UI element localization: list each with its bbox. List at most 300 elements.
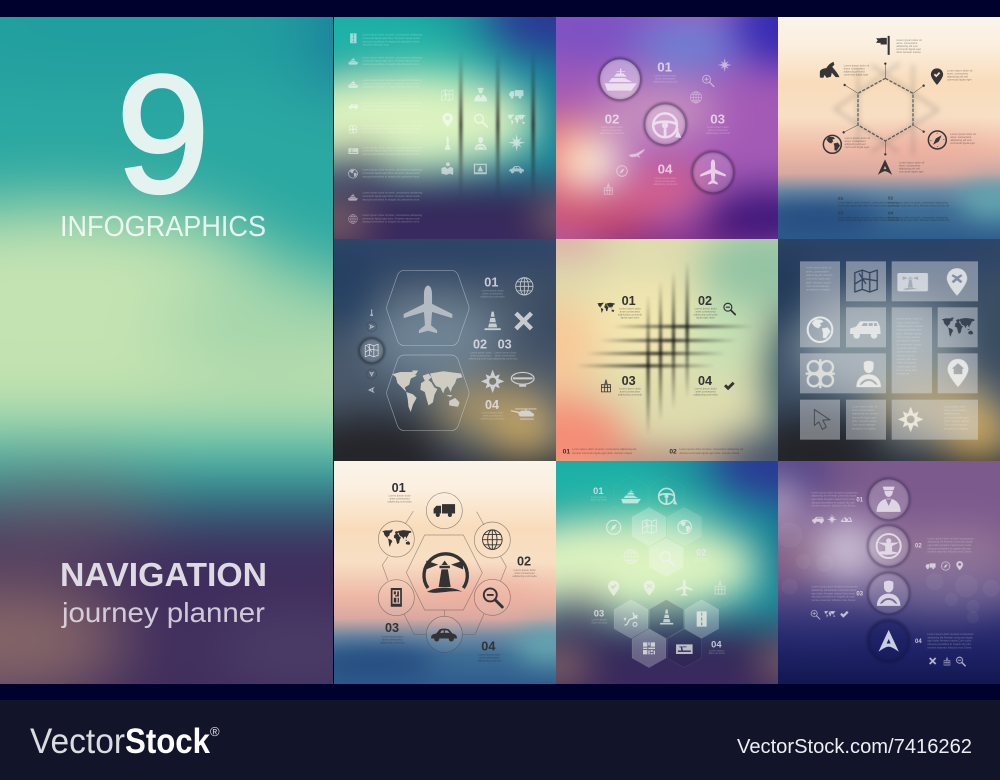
label text: Lorem ipsum dolor <box>707 125 729 129</box>
icon: magnifier plus <box>811 610 820 619</box>
number text: dolor sit amet <box>591 498 607 502</box>
icon: magnifier <box>660 552 674 566</box>
peach background <box>755 15 1000 242</box>
icon: tower <box>445 136 451 150</box>
label text: Lorem ipsum dolor <box>601 125 623 129</box>
number text: adipiscing commodo <box>618 313 643 317</box>
callout text: commodo ligula eget <box>896 47 921 51</box>
icon: interchange <box>349 125 357 134</box>
dark icons <box>597 303 735 392</box>
bottom legend <box>838 196 950 222</box>
hexagon frame: plane <box>387 270 469 346</box>
icon: map book <box>441 162 453 175</box>
bottom legend: Lorem ipsum dolor sit amet, consectetur adipiscing <box>838 215 898 219</box>
bottom legend: 04 <box>888 210 894 215</box>
icon: route <box>623 613 638 626</box>
numbers: 04 <box>485 398 499 412</box>
callout text: adipiscing elit sed <box>845 142 866 146</box>
icon: world map <box>392 371 463 412</box>
crossing shadow lines <box>576 261 753 435</box>
bottom legend: 01 <box>838 196 844 201</box>
paragraph text <box>811 490 974 649</box>
icon: map <box>442 90 453 101</box>
paragraph text: natoque penatibus et magnis dis part <box>927 546 971 550</box>
number text: adipiscing commodo <box>380 640 405 644</box>
bottom notes: Aenean commodo ligula eget dolor. Aenean massa <box>572 451 632 455</box>
icon: pin cross <box>947 268 967 296</box>
callout text: commodo ligula eget <box>899 170 924 174</box>
icon list text: Lorem ipsum dolor sit amet, consectetur adipiscing <box>362 55 423 59</box>
icon list text: commodo ligula eget dolor. Aenean massa sociis <box>362 81 420 85</box>
tile text: Cum sociis natoque <box>897 335 921 339</box>
icon: compass <box>928 131 946 149</box>
numbers: 02 <box>698 294 712 308</box>
number text: amet consectetur <box>382 637 403 641</box>
callout text: amet, consectetur <box>950 135 972 139</box>
circle: plane <box>692 152 734 193</box>
icon list text: Lorem ipsum dolor sit amet, consectetur adipiscing <box>362 145 423 149</box>
icon: earth <box>678 520 691 534</box>
number text: Lorem ipsum dolor <box>381 634 403 638</box>
icon: cone <box>660 609 673 624</box>
center lighthouse emblem <box>424 554 467 593</box>
tile text: penatibus et magnis <box>897 339 921 343</box>
callout text: amet, consectetur <box>845 139 866 143</box>
small icons <box>604 58 732 194</box>
paragraph text: eget dolor Aenean massa Cum sociis <box>811 497 856 501</box>
brand: VectorStock: Stock <box>125 722 210 761</box>
callout text: amet, consectetur <box>947 72 968 76</box>
number text: Lorem ipsum dolor <box>478 653 500 657</box>
icon: pin <box>442 113 453 127</box>
icon: blimp <box>511 372 534 387</box>
paragraph text: adipiscing elit Aenean commodo ligula <box>811 494 857 498</box>
dark hexagons <box>649 600 701 668</box>
icon: world <box>824 611 835 618</box>
numbers <box>473 276 512 412</box>
icon: pin check <box>608 581 619 596</box>
bottom legend: commodo ligula eget dolor Aenean massa sociis nat <box>888 218 950 222</box>
callout text: amet, consectetur <box>844 66 865 70</box>
paragraph text: adipiscing elit Aenean commodo ligula <box>927 635 973 639</box>
circle: driver <box>868 573 909 614</box>
icon: cross <box>514 312 533 330</box>
honeycomb icons <box>607 488 725 654</box>
number text: ligula eget dolor <box>696 316 715 320</box>
label text: amet consectetur <box>602 128 622 132</box>
callout text: adipiscing elit sed <box>844 69 865 73</box>
image id: VectorStock.com/7416262 <box>737 736 972 758</box>
number text: adipiscing commodo <box>481 294 505 298</box>
icon list text: Lorem ipsum dolor sit amet, consectetur adipiscing <box>362 33 423 37</box>
bottom legend: commodo ligula eget dolor Aenean massa sociis nat <box>838 203 900 207</box>
bottom legend: Lorem ipsum dolor sit amet, consectetur adipiscing <box>838 201 898 205</box>
icon: world <box>382 530 411 547</box>
numbered labels: 01 <box>657 60 673 75</box>
icon: road <box>350 33 357 43</box>
circle: sailor <box>868 479 909 520</box>
tile text: Nulla consequat <box>897 361 916 365</box>
pastel background <box>489 171 856 538</box>
number text: adipiscing commodo <box>513 574 537 578</box>
paragraph text: natoque penatibus et magnis dis part <box>811 500 855 504</box>
icon list text: natoque penatibus et magnis dis parturient mont <box>362 62 419 66</box>
tile text: nascetur ridiculus <box>897 346 918 350</box>
icon: check <box>840 611 849 618</box>
icon: desk globe <box>516 278 533 295</box>
icon list text: commodo ligula eget dolor. Aenean massa sociis <box>362 149 420 153</box>
label text: adipiscing commodo <box>653 182 678 186</box>
bottom legend: 02 <box>888 196 894 201</box>
tile text: commodo ligula eget <box>852 415 877 419</box>
number labels: 01 <box>856 497 864 503</box>
icon: nav small <box>370 309 373 316</box>
icon list text: natoque penatibus et magnis dis parturient mont <box>362 130 419 134</box>
icon list text: commodo ligula eget dolor. Aenean massa sociis <box>362 104 420 108</box>
icon: car <box>431 629 457 642</box>
icon: yacht <box>621 490 641 503</box>
number text: adipiscing commodo <box>694 393 718 397</box>
callout text: Lorem ipsum dolor sit <box>947 69 973 73</box>
icon: house map <box>604 184 612 194</box>
number text: amet consectetur <box>495 353 516 357</box>
icon list text: commodo ligula eget dolor. Aenean massa sociis <box>362 59 420 63</box>
icon: map person <box>601 380 611 392</box>
tile text: adipiscing elit. Aenean <box>806 273 833 277</box>
number text: Lorem ipsum <box>694 556 710 560</box>
teal background <box>476 393 869 760</box>
icon: road <box>697 611 707 627</box>
icon: compass star <box>508 134 525 151</box>
icon: compass <box>941 562 950 570</box>
brand: VectorStock <box>30 722 220 761</box>
icon: suv <box>812 517 824 523</box>
icon: globe <box>690 92 702 103</box>
vertical shadow columns <box>459 52 535 198</box>
callout text: commodo ligula eget <box>844 72 868 76</box>
tile text: amet, consectetuer <box>806 269 829 273</box>
callout text: commodo ligula eget <box>845 145 869 149</box>
icon: qr map <box>643 642 655 654</box>
icon: screen <box>474 164 487 174</box>
numbers: 03 <box>498 338 512 352</box>
numbers: 01 <box>622 294 636 308</box>
icon: pin cross <box>644 580 655 596</box>
label text: amet consectetur <box>708 128 728 132</box>
panel: crossing shadows <box>489 171 856 538</box>
numbered labels <box>605 60 725 177</box>
tile text: penatibus et magnis <box>944 426 968 430</box>
icon list text: natoque penatibus et magnis dis parturient mont <box>362 220 419 224</box>
tile text: adipiscing elit. Aenean <box>897 324 924 328</box>
tile text: ultricies nec eu <box>897 353 915 357</box>
icon list text: natoque penatibus et magnis dis parturient mont <box>362 197 419 201</box>
panel: list with vertical shadows <box>334 17 556 239</box>
panel: lighthouse hexagon <box>311 460 587 687</box>
bokeh lights <box>777 522 1000 623</box>
number labels: 03 <box>856 592 864 598</box>
icon: truck <box>926 563 936 569</box>
tile text: penatibus et magnis <box>852 426 876 430</box>
numbers <box>593 486 722 649</box>
callout text: Lorem ipsum dolor sit <box>899 161 925 165</box>
icon: sign <box>676 644 693 654</box>
icon list text: natoque penatibus et magnis dis parturient mont <box>362 152 419 156</box>
small icon rows <box>811 514 965 666</box>
title: NAVIGATION: NAVIGATION <box>60 556 267 593</box>
icon: earth <box>823 135 841 153</box>
panel: hexagon honeycomb <box>476 393 869 760</box>
violet background <box>711 393 1000 777</box>
icon list text: nascetur ridiculus mus <box>362 43 389 47</box>
icon: rose <box>481 370 504 393</box>
icon list text: commodo ligula eget dolor. Aenean massa sociis <box>362 127 420 131</box>
label text: amet consectetur <box>655 179 676 183</box>
number text: Lorem ipsum dolor <box>470 350 492 354</box>
number text: amet consectetur <box>695 310 716 314</box>
icon list text <box>362 33 423 224</box>
tile text: amet, consectetuer <box>944 408 967 412</box>
tile text: fringilla vel <box>897 372 910 376</box>
callout text: dolor Aenean massa <box>896 50 921 54</box>
icon: driver <box>475 137 487 150</box>
tile text: commodo ligula eget <box>944 415 969 419</box>
numbered labels: 03 <box>710 111 725 126</box>
number text: adipiscing commodo <box>481 417 505 421</box>
label text: Lorem ipsum dolor <box>654 176 676 180</box>
icon: map pin <box>642 520 656 533</box>
numbers: 02 <box>517 555 531 569</box>
number text: dolor sit amet <box>709 651 725 655</box>
icon: world <box>597 303 615 313</box>
icon: circle nav down <box>367 369 377 379</box>
bottom legend: Lorem ipsum dolor sit amet, consectetur adipiscing <box>888 201 948 205</box>
icon list column <box>348 33 359 223</box>
icon: bird <box>629 149 645 158</box>
bottom legend: commodo ligula eget dolor Aenean massa sociis nat <box>888 203 950 207</box>
icon: cursor <box>814 410 830 429</box>
icon: earth <box>808 317 832 342</box>
paragraph text: eget dolor Aenean massa Cum sociis <box>811 591 856 595</box>
panel: tile mosaic <box>711 171 1000 538</box>
number text: amet consectetur <box>479 656 500 660</box>
icon list text: natoque penatibus et magnis dis parturient mont <box>362 174 419 178</box>
number text: amet consectetur <box>482 291 503 295</box>
icon list text: commodo ligula eget dolor. Aenean massa sociis <box>362 216 420 220</box>
number text: amet consectetur <box>514 571 535 575</box>
number text: adipiscing commodo <box>469 356 493 360</box>
numbers: 01 <box>593 486 604 496</box>
tile text: Cum sociis natoque <box>806 284 830 288</box>
hexagon frame: world <box>387 355 469 431</box>
numbers: 02 <box>473 338 487 352</box>
number text: Lorem ipsum dolor <box>619 307 641 311</box>
icon: world <box>507 114 526 125</box>
tile icons <box>806 268 975 432</box>
callout text: adipiscing elit sed <box>899 167 920 171</box>
big numeral 9: 9 <box>116 40 210 228</box>
connector pins <box>843 63 925 155</box>
dark slate background <box>711 171 1000 538</box>
icon: suv <box>850 321 881 339</box>
icon: phone map <box>391 588 402 607</box>
tile text: dolor. Aenean massa <box>944 419 969 423</box>
number text: Lorem ipsum dolor <box>619 387 641 391</box>
tile text: pretium quis sem <box>897 357 918 361</box>
panel: circles on purple <box>556 17 778 239</box>
numbers: 02 <box>696 548 707 558</box>
purple background <box>556 17 778 239</box>
icon: truck <box>509 90 523 99</box>
icon: flag <box>876 36 890 55</box>
footer bar <box>0 700 1000 780</box>
number text: adipiscing commodo <box>694 313 718 317</box>
number text: adipiscing commodo <box>618 393 643 397</box>
callout text: Lorem ipsum dolor sit <box>845 136 870 140</box>
icon: cross <box>929 657 936 665</box>
tile text: dolor. Aenean massa <box>806 280 831 284</box>
tile text: penatibus et magnis <box>806 288 830 292</box>
number text: dolor sit amet <box>591 620 608 624</box>
callout text: Lorem ipsum dolor sit <box>844 63 869 67</box>
label text: adipiscing commodo <box>653 79 678 83</box>
numbers: 03 <box>385 621 399 635</box>
label: INFOGRAPHICS: INFOGRAPHICS <box>60 211 266 243</box>
number text <box>469 288 518 421</box>
tile text: Cum sociis natoque <box>944 423 968 427</box>
icon: world dark <box>942 318 975 337</box>
icon list text: Lorem ipsum dolor sit amet, consectetur adipiscing <box>362 213 423 217</box>
tile blocks <box>800 261 978 440</box>
icon: check <box>724 382 735 390</box>
active circle: map <box>359 338 384 363</box>
tile text: Lorem ipsum dolor sit <box>806 266 832 270</box>
label text <box>600 73 731 186</box>
number text: adipiscing commodo <box>493 356 518 360</box>
number text <box>591 495 725 655</box>
callout text: Lorem ipsum dolor sit <box>950 132 976 136</box>
tile text <box>806 266 969 430</box>
icon circles <box>378 493 510 652</box>
number text: adipiscing commodo <box>388 500 412 504</box>
paragraph text: eget dolor Aenean massa Cum sociis <box>927 639 972 643</box>
icon: lighthouse card <box>897 273 928 291</box>
brand: VectorStock: ® <box>210 724 220 739</box>
paragraph text: natoque penatibus et magnis dis part <box>927 642 971 646</box>
icon grid <box>441 88 526 175</box>
outlined hexagons <box>597 477 737 608</box>
panel: hexagon peach <box>755 15 1000 242</box>
number text: Lorem ipsum dolor <box>695 307 717 311</box>
dark slate background <box>267 171 634 538</box>
number text <box>618 307 718 397</box>
number labels <box>856 497 922 645</box>
icon: globe <box>483 530 502 549</box>
numbers: 04 <box>481 639 495 653</box>
icon: compass rose <box>898 406 924 432</box>
icon: ship <box>348 80 359 88</box>
icon: road clover <box>806 359 835 388</box>
tile text: adipiscing elit. Aenean <box>852 412 879 416</box>
icon: star <box>718 58 732 72</box>
icon: jeep <box>348 104 358 110</box>
number text: Lorem ipsum dolor <box>695 387 717 391</box>
tile text: Lorem ipsum dolor sit <box>897 317 922 321</box>
circle: ship <box>599 59 641 100</box>
icon list text: Lorem ipsum dolor sit amet, consectetur adipiscing <box>362 101 423 105</box>
right icons <box>481 278 536 419</box>
dark icons <box>382 504 502 642</box>
icon: nav left <box>368 387 375 393</box>
icon: plane <box>676 580 693 596</box>
icon: cone <box>485 312 501 330</box>
icon: globe <box>349 215 357 223</box>
number text: Lorem ipsum dolor <box>482 411 504 415</box>
central hexagon and connectors <box>382 511 506 634</box>
tile text: dis parturient montes <box>897 342 922 346</box>
numbers: 01 <box>484 276 498 290</box>
panel: hexagon plane and world <box>267 171 634 538</box>
number text: Lorem ipsum <box>592 618 608 622</box>
tile text: Cum sociis natoque <box>852 423 876 427</box>
paragraph text: eget dolor Aenean massa Cum sociis <box>927 543 972 547</box>
number text: adipiscing commodo <box>477 659 502 663</box>
icon: pin <box>956 561 963 570</box>
icon: boat <box>348 58 358 65</box>
number text <box>380 494 537 663</box>
numbers: 03 <box>622 374 636 388</box>
icon: star <box>827 514 837 525</box>
number text: Lorem ipsum dolor <box>389 494 411 498</box>
circle: lighthouse wheel <box>868 525 909 567</box>
icon list text: natoque penatibus et magnis dis parturient mont <box>362 39 419 43</box>
number text: Lorem ipsum dolor <box>514 568 536 572</box>
paragraph text: montes nascetur ridiculus mus Donec <box>927 645 972 649</box>
label text: Lorem ipsum dolor <box>654 73 676 77</box>
tile text: massa quis enim <box>897 364 917 368</box>
hexagon outline <box>858 78 913 141</box>
numbered labels: 02 <box>605 111 619 126</box>
paragraph text: montes nascetur ridiculus mus Donec <box>811 598 856 602</box>
icon list text: natoque penatibus et magnis dis parturient mont <box>362 107 419 111</box>
paragraph text: Lorem ipsum dolor sit amet consectetur <box>927 632 974 636</box>
panel: cover title <box>0 17 333 684</box>
peach background <box>311 460 587 687</box>
callout text: amet, consectetur <box>896 41 918 45</box>
number text: amet consectetur <box>620 390 640 394</box>
number text: Lorem ipsum dolor <box>494 350 516 354</box>
icon: navigation arrow <box>878 159 892 175</box>
paragraph text: adipiscing elit Aenean commodo ligula <box>927 540 973 544</box>
dark icons <box>820 36 946 175</box>
number text: Lorem ipsum <box>591 495 607 499</box>
icon list text: commodo ligula eget dolor. Aenean massa sociis <box>362 194 420 198</box>
numbered labels: 04 <box>658 162 673 177</box>
tile text: dolor. Aenean massa <box>897 331 922 335</box>
bottom notes <box>563 447 744 455</box>
filled hexagons <box>614 507 719 668</box>
circle: steering wheel <box>645 104 686 145</box>
number text: amet consectetur <box>389 497 410 501</box>
panel: vertical circles <box>711 393 1000 777</box>
number text: amet consectetur <box>470 353 491 357</box>
callout text: commodo ligula eget <box>950 141 975 145</box>
teal background <box>334 17 556 239</box>
bottom legend: 03 <box>838 211 844 216</box>
paragraph text: montes nascetur ridiculus mus Donec <box>811 504 856 508</box>
cover blurred background <box>0 17 333 684</box>
callout text: Lorem ipsum dolor sit <box>896 38 922 42</box>
